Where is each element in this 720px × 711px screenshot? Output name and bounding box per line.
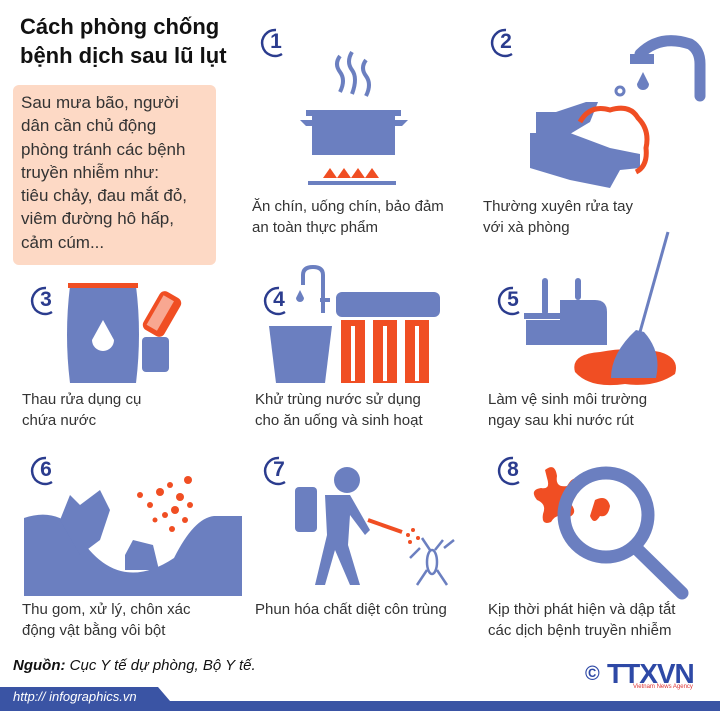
numbers: 1 [270,30,282,53]
icon 2: faucet and hands [530,41,700,188]
icon 4: water filter [269,267,440,383]
text: 2 [500,30,512,53]
title: bệnh dịch sau lũ lụt [20,43,227,68]
text: 6 [40,458,52,481]
icon 6: burial pit [24,476,242,596]
text: ngay sau khi nước rút [488,412,634,429]
text: các dịch bệnh truyền nhiễm [488,622,671,639]
title [20,14,227,68]
text: 5 [507,288,519,311]
text: chứa nước [22,412,96,429]
text: Phun hóa chất diệt côn trùng [255,601,447,618]
intro text box: truyền nhiễm như: [21,163,159,182]
source: Nguồn: Cục Y tế dự phòng, Bộ Y tế. [13,657,256,674]
intro text box: phòng tránh các bệnh [21,140,185,159]
text: 4 [273,288,285,311]
text: 3 [40,288,52,311]
text: Kịp thời phát hiện và dập tắt [488,601,675,618]
logo TTXVN: TTXVN [607,658,694,689]
icon 8: magnifier and virus [534,467,682,593]
intro text box: cảm cúm... [21,233,104,252]
icon 7: sprayer and mosquito [295,467,454,585]
website: http:// infographics.vn [13,689,137,704]
footer bar [0,687,720,711]
number rings [32,30,519,484]
text: 7 [273,458,285,481]
intro text box: viêm đường hô hấp, [21,209,174,228]
text: 8 [507,458,519,481]
logo TTXVN: Vietnam News Agency [633,684,693,690]
text: Thau rửa dụng cụ [22,391,141,408]
text: Khử trùng nước sử dụng [255,391,421,408]
text: động vật bằng vôi bột [22,622,165,639]
captions: Ăn chín, uống chín, bảo đảm [252,198,444,215]
text: Thu gom, xử lý, chôn xác [22,601,190,618]
intro text box [13,85,216,265]
icon 1: pot [300,52,408,185]
text: cho ăn uống và sinh hoạt [255,412,423,429]
captions: an toàn thực phẩm [252,219,378,236]
captions [252,198,444,236]
intro text box: dân cần chủ động [21,116,156,135]
intro text box: Sau mưa bão, người [21,93,179,112]
icon 5: broom, dustpan, mop [524,232,676,385]
intro text box: tiêu chảy, đau mắt đỏ, [21,186,187,205]
icon 3: barrel brush sponge [67,283,183,383]
text: với xà phòng [483,219,570,236]
text: Làm vệ sinh môi trường [488,391,647,408]
title: Cách phòng chống [20,14,219,39]
text: Thường xuyên rửa tay [483,198,633,215]
logo TTXVN: © [585,663,600,685]
